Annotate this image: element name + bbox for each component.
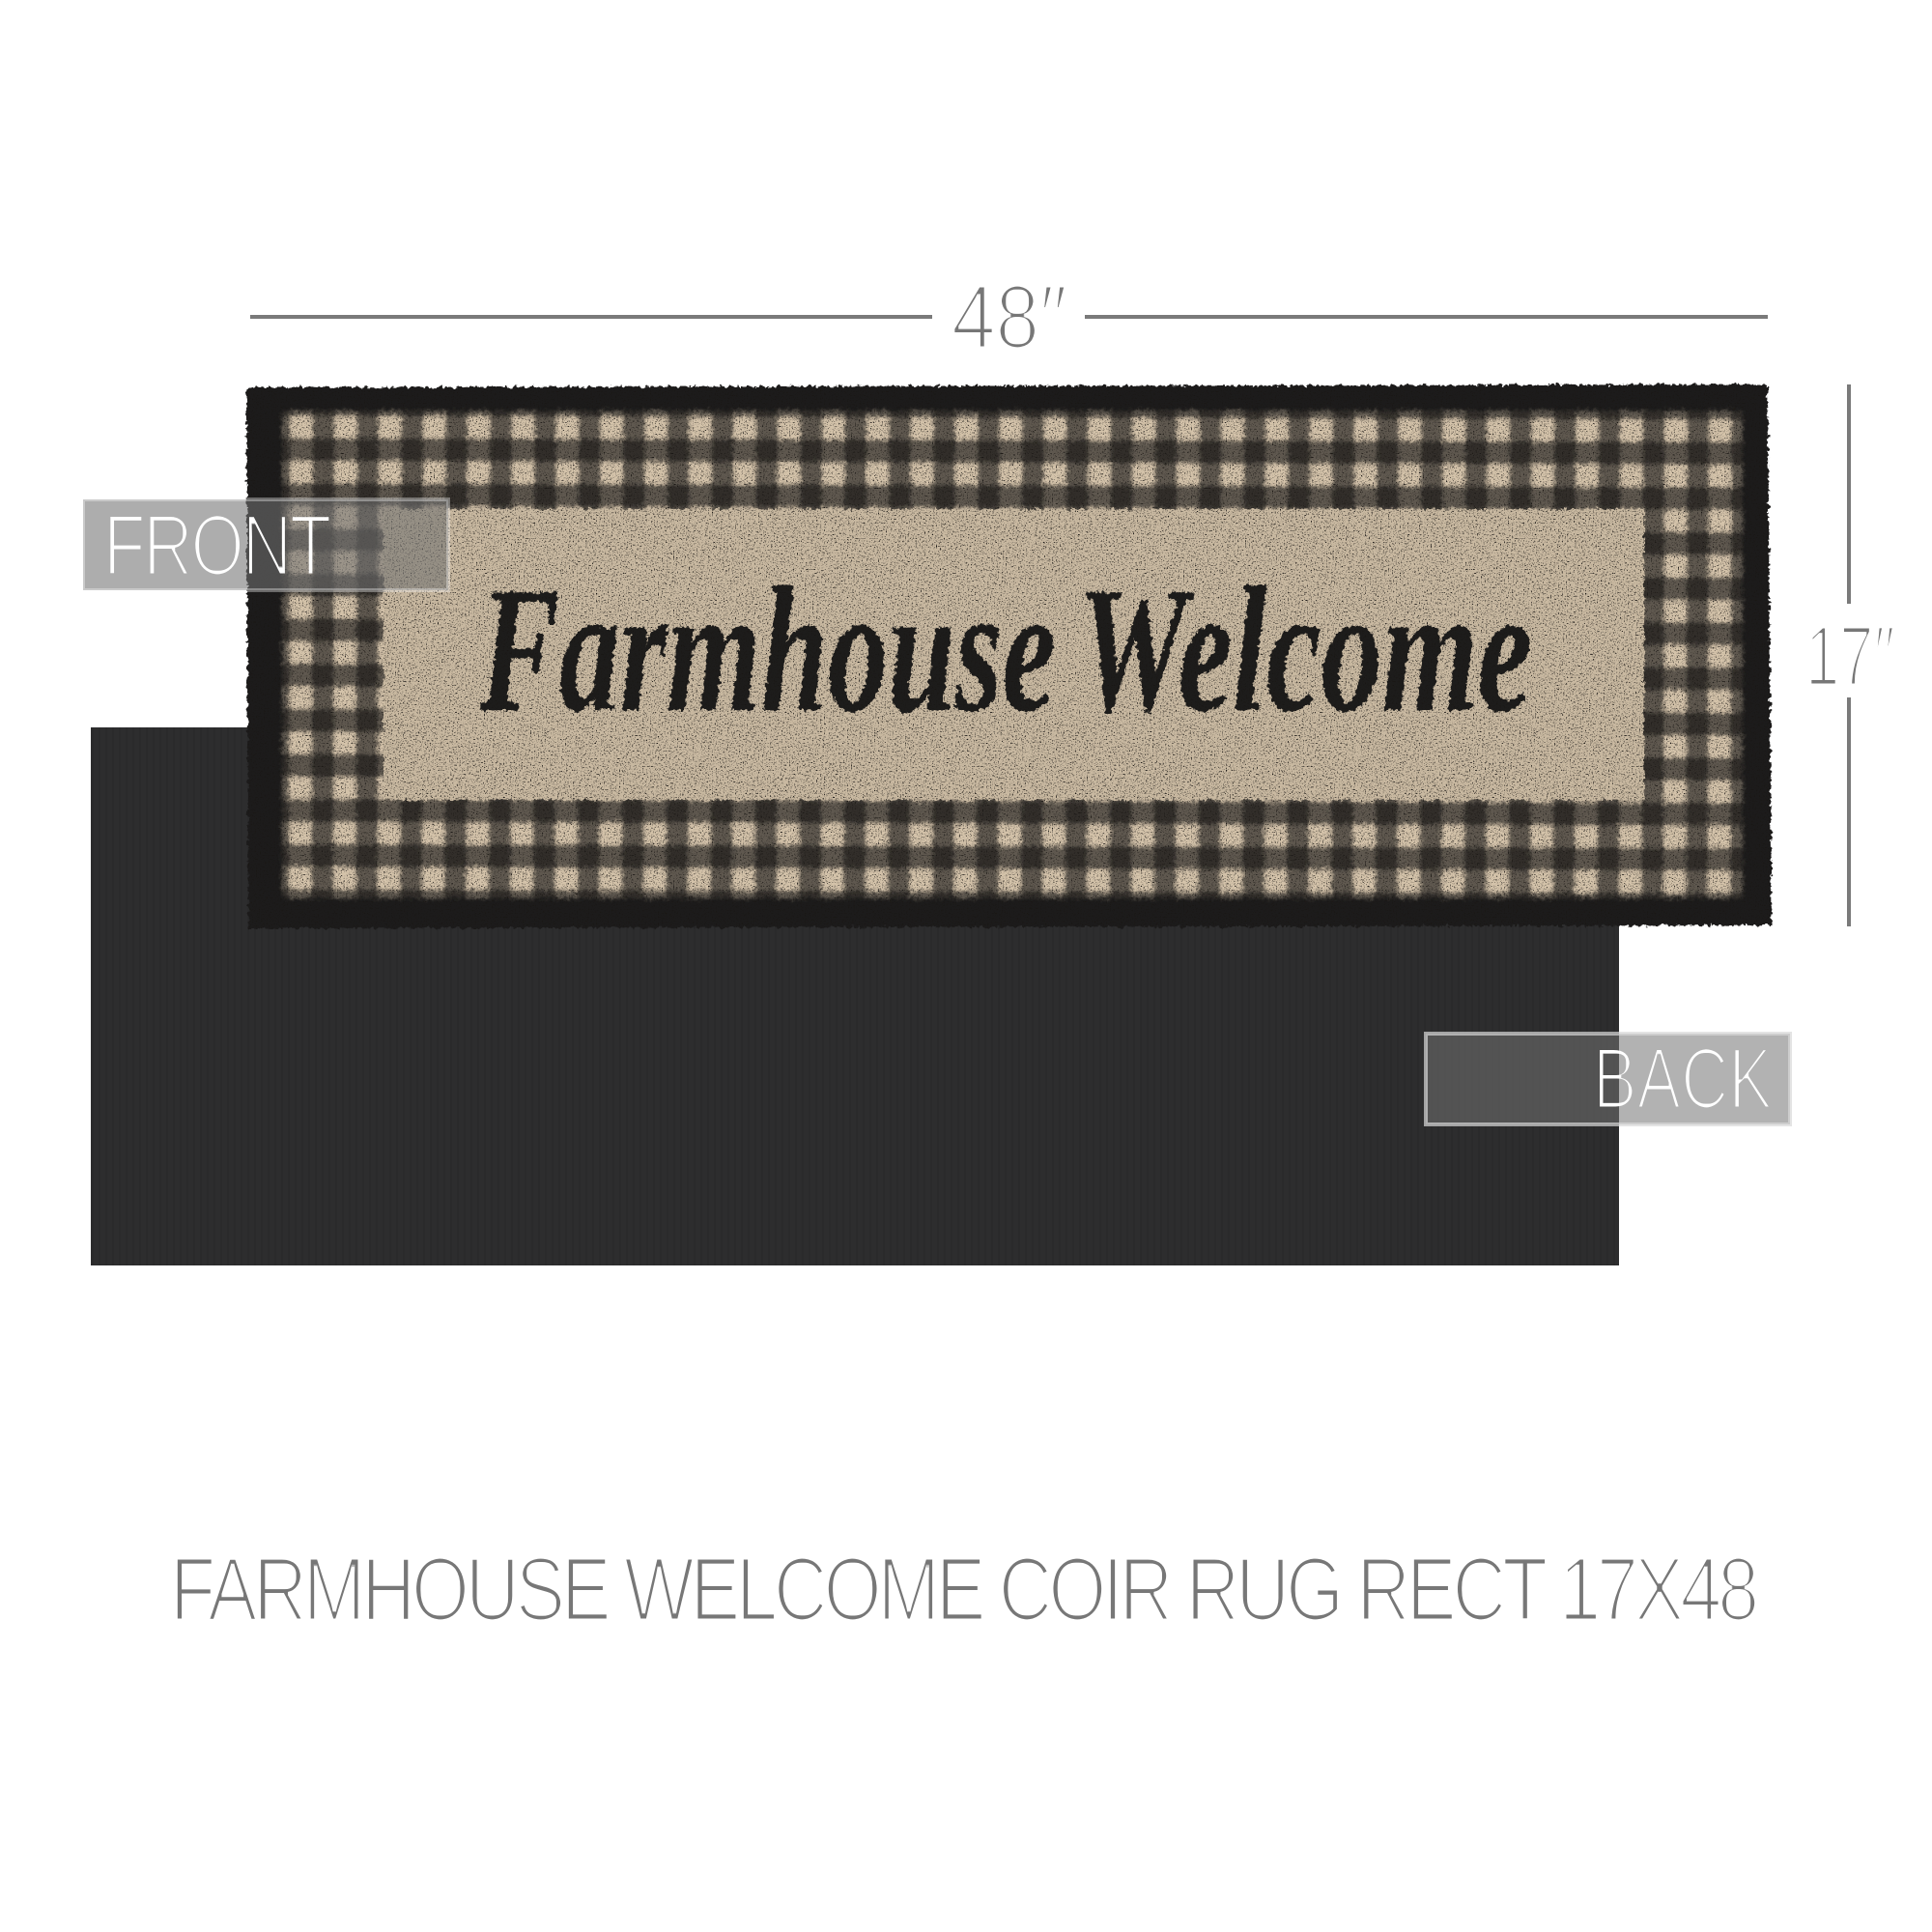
width dimension: 48 inches <box>250 267 1768 367</box>
BACK label <box>1426 1030 1790 1126</box>
central beige panel <box>384 509 1644 800</box>
height dimension: 17 inches <box>1805 384 1895 926</box>
FRONT label: FRONT <box>103 497 330 593</box>
script lettering: Welcome <box>1078 551 1532 750</box>
gingham check band <box>282 411 1743 898</box>
width dimension: 48 inches: 48″ <box>952 267 1067 367</box>
back side of rug <box>91 727 1619 1265</box>
height dimension: 17 inches: 17″ <box>1805 610 1895 703</box>
script lettering: Farmhouse <box>478 551 1056 750</box>
front side of rug <box>246 384 1772 928</box>
BACK label: BACK <box>1593 1030 1773 1126</box>
rug black border <box>246 384 1772 928</box>
